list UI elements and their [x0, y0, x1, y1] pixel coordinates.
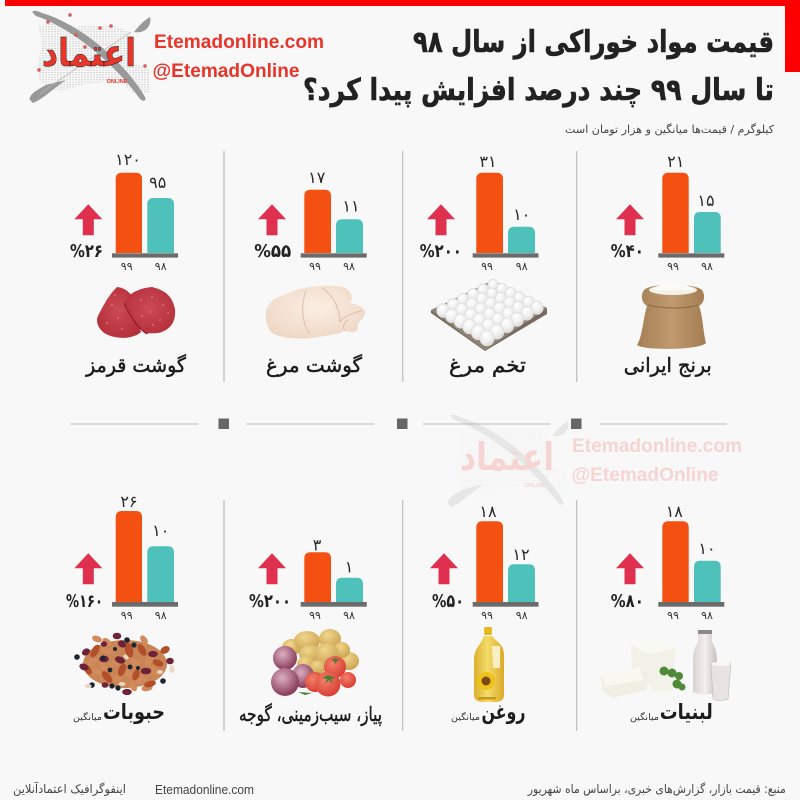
panel: legumes [66, 492, 178, 724]
label: dairy: میانگین [630, 711, 659, 723]
arrow up [74, 204, 102, 235]
bar chart: oil: ۱۲ [512, 545, 530, 564]
bar chart: dairy: ۱۰ [698, 539, 716, 558]
percent change: %۲۶ [70, 241, 103, 262]
bar chart: legumes [112, 492, 178, 622]
arrow up [616, 204, 644, 235]
bar chart: legumes: ۹۸ [155, 609, 167, 622]
watermark: Etemadonline.com [572, 436, 742, 457]
footer: website: Etemadonline.com [155, 782, 254, 797]
percent change: %۴۰ [611, 241, 644, 262]
footer: credit: اینفوگرافیک اعتمادآنلاین [13, 781, 126, 797]
bar chart: legumes: ۹۹ [121, 609, 133, 622]
label: Iranian rice: برنج ایرانی [624, 353, 712, 377]
title [303, 25, 774, 108]
label: legumes [73, 700, 165, 724]
icon: red meat [97, 287, 175, 338]
arrow up [258, 553, 286, 584]
label: oil: میانگین [451, 711, 480, 723]
bar chart: oil [473, 502, 538, 622]
top red frame [5, 0, 800, 72]
bar chart: dairy: ۹۹ [667, 609, 679, 622]
bar chart: dairy [658, 502, 724, 622]
label: oil [451, 700, 526, 724]
bar chart: chicken: ۹۹ [309, 260, 321, 273]
percent change: %۱۶۰ [66, 591, 103, 612]
bar chart: dairy: ۹۸ [701, 609, 713, 622]
icon: oil bottle [474, 627, 504, 702]
panel: dairy [601, 502, 731, 724]
bar chart: eggs [473, 152, 538, 273]
bar chart: vegetables: ۹۸ [343, 609, 355, 622]
panel: red meat [70, 150, 186, 377]
bar chart: chicken: ۹۸ [343, 260, 355, 273]
panel: cooking oil [430, 502, 538, 724]
label: legumes: میانگین [73, 711, 102, 723]
bar chart: rice: ۹۸ [701, 260, 713, 273]
bar chart: rice [658, 152, 724, 273]
social handle: @EtemadOnline [152, 61, 300, 82]
bar chart: red meat: ۱۲۰ [115, 150, 141, 169]
arrow up [427, 204, 455, 235]
label: legumes: حبوبات [103, 700, 165, 724]
percent change: %۲۰۰ [249, 591, 291, 612]
watermark: @EtemadOnline [572, 465, 718, 486]
panel: onion, potato, tomato [239, 536, 382, 727]
bar chart: oil: ۹۸ [516, 609, 528, 622]
logo: Etemad Online: اعتماد [42, 33, 136, 75]
bar chart: chicken [301, 168, 367, 273]
panel: Iranian rice [611, 152, 724, 377]
arrow up [616, 553, 644, 584]
icon: rice sack [637, 283, 706, 349]
icon: vegetables [271, 629, 359, 696]
bar chart: eggs: ۳۱ [479, 152, 497, 171]
logo: Etemad Online: ONLINE [107, 79, 128, 85]
label: onion, potato, tomato: پیاز، سیب‌زمینی، گوجه [239, 702, 382, 727]
icon: egg tray [431, 280, 547, 351]
bar chart: legumes: ۱۰ [152, 521, 169, 540]
label: dairy: لبنیات [660, 700, 713, 724]
label: chicken: گوشت مرغ [266, 353, 362, 377]
bar chart: eggs: ۹۹ [481, 260, 493, 273]
panel: eggs [420, 152, 547, 377]
bar chart: red meat: ۹۵ [149, 173, 166, 192]
icon: raw chicken [266, 286, 365, 339]
icon: dairy products [601, 630, 731, 700]
label: oil: روغن [482, 700, 526, 724]
bar chart: legumes: ۲۶ [120, 492, 138, 511]
bar chart: rice: ۲۱ [667, 152, 684, 171]
title: تا سال ۹۹ چند درصد افزایش پیدا کرد؟ [303, 73, 774, 108]
label: dairy [630, 700, 713, 724]
label: red meat: گوشت قرمز [85, 353, 186, 377]
bar chart: dairy: ۱۸ [666, 502, 683, 521]
bar chart: oil: ۹۹ [481, 609, 493, 622]
bar chart: rice: ۱۵ [697, 191, 715, 210]
bar chart: vegetables: ۹۹ [309, 609, 321, 622]
bar chart: eggs: ۱۰ [513, 205, 530, 224]
logo: Etemad Online [30, 11, 150, 103]
bar chart: red meat [112, 150, 178, 273]
bar chart: vegetables: ۳ [313, 536, 322, 555]
arrow up [430, 553, 458, 584]
percent change: %۵۵ [254, 241, 291, 262]
bar chart: red meat: ۹۸ [155, 260, 167, 273]
watermark: ONLINE [525, 483, 546, 489]
percent change: %۸۰ [611, 591, 644, 612]
bar chart: red meat: ۹۹ [121, 260, 133, 273]
bar chart: chicken: ۱۱ [342, 197, 360, 216]
percent change: %۵۰ [432, 591, 464, 612]
watermark [448, 415, 742, 507]
watermark: اعتماد [460, 437, 554, 479]
percent change: %۲۰۰ [420, 241, 462, 262]
bar chart: vegetables [301, 536, 367, 622]
bar chart: chicken: ۱۷ [308, 168, 326, 187]
bar chart: eggs: ۹۸ [516, 260, 528, 273]
bar chart: oil: ۱۸ [479, 502, 497, 521]
website address: Etemadonline.com [154, 32, 324, 53]
panel: chicken [254, 168, 367, 377]
arrow up [258, 204, 286, 235]
icon: beans [74, 633, 175, 695]
arrow up [74, 553, 102, 584]
subtitle: کیلوگرم / قیمت‌ها میانگین و هزار تومان است [565, 123, 775, 136]
label: eggs: تخم مرغ [449, 353, 526, 377]
bar chart: rice: ۹۹ [667, 260, 679, 273]
bar chart: vegetables: ۱ [345, 558, 353, 577]
